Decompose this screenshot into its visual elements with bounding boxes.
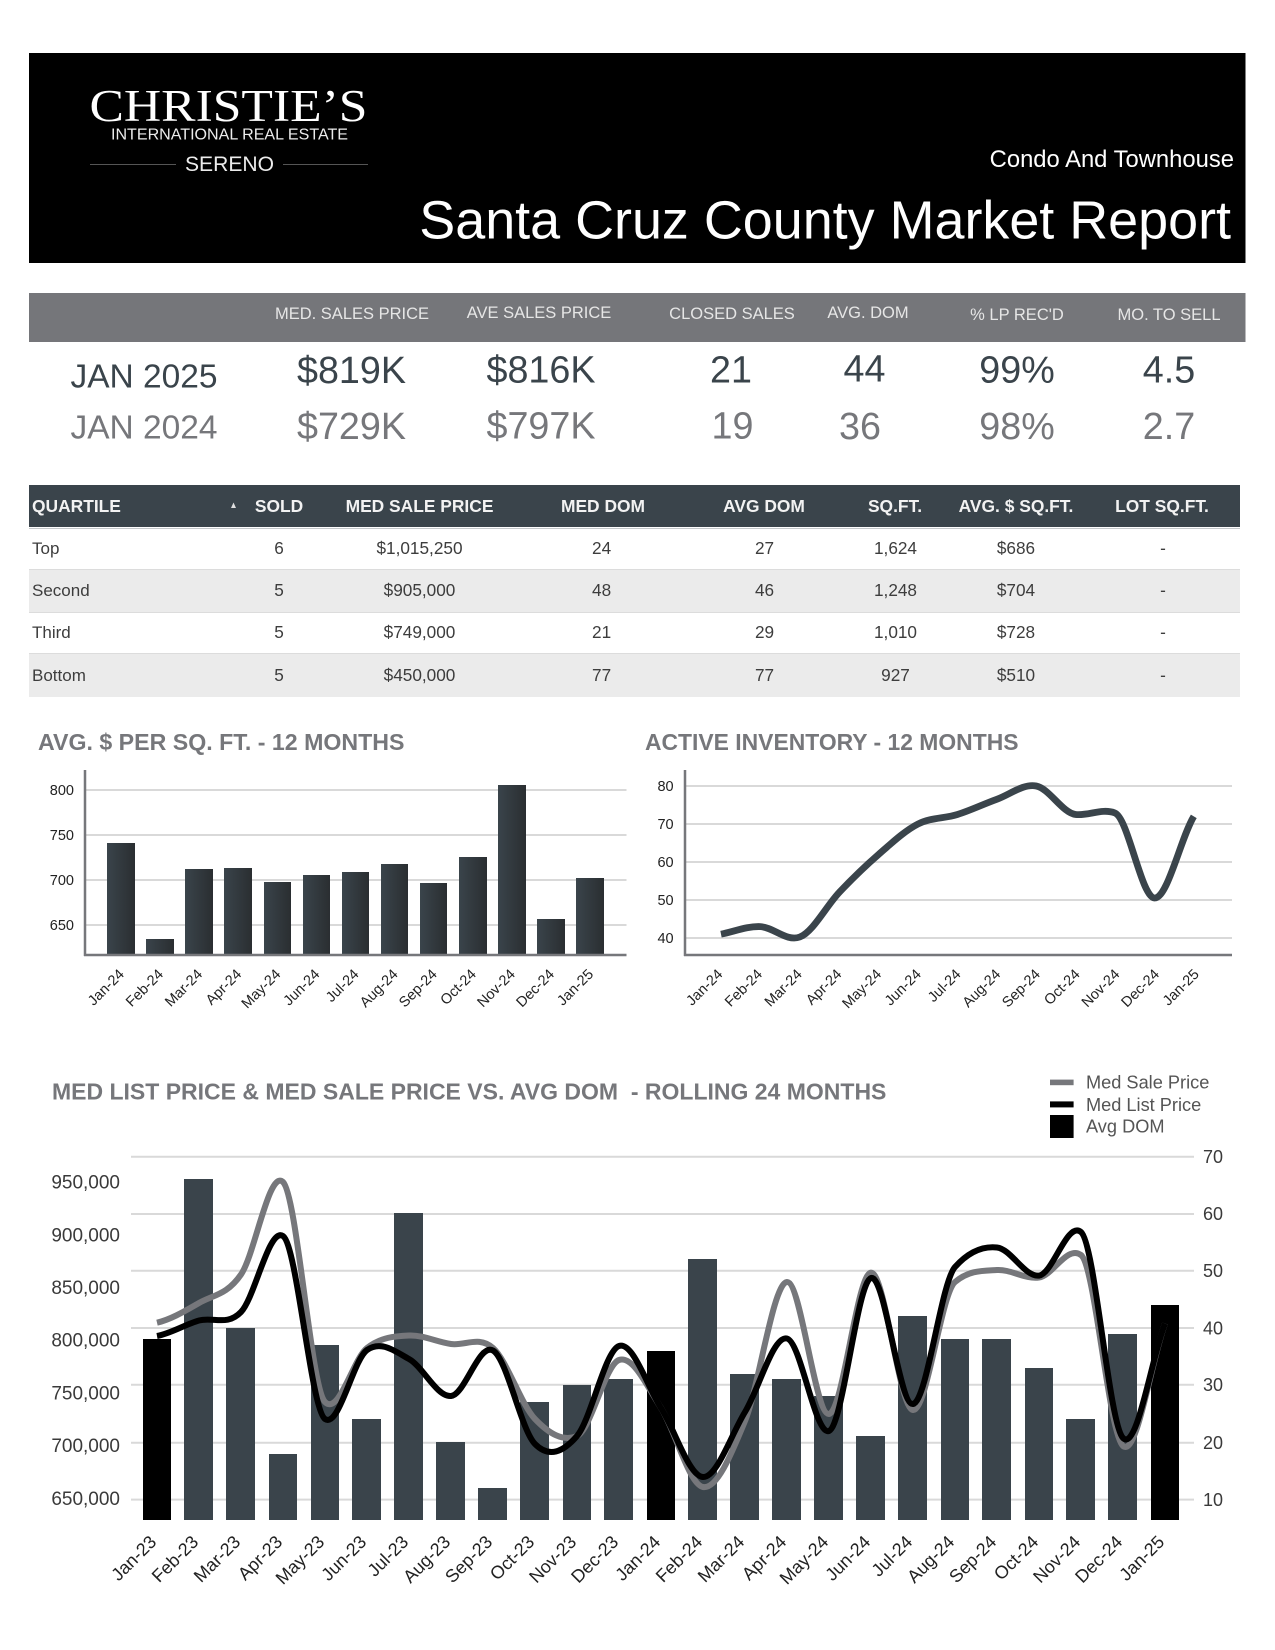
month labels: Sep-24 [945, 1532, 1000, 1587]
right axis: DOM: 50 [1203, 1261, 1223, 1281]
table row: Second: 5 [274, 580, 284, 600]
table row: Second [29, 569, 1240, 612]
table row: Third: $749,000 [384, 622, 455, 642]
line chart: active inventory, 12 months: Nov-24 [1079, 967, 1123, 1011]
key metrics: Jan 2025 row: 99% [979, 349, 1055, 391]
table row: Third: 1,010 [874, 622, 917, 642]
table header row: MED DOM [561, 496, 645, 516]
quartile table [29, 485, 1240, 697]
table row: Third: Third [32, 623, 71, 642]
bar chart: avg $ per sq ft, 12 months [50, 770, 626, 1012]
right axis: DOM [1203, 1147, 1223, 1510]
table row: Second: - [1160, 580, 1166, 600]
legend: Med Sale Price [1086, 1073, 1209, 1093]
month labels: Oct-23 [486, 1532, 538, 1584]
left axis: price: 700,000 [51, 1436, 120, 1457]
month labels: Jul-24 [868, 1532, 916, 1580]
month labels: Feb-23 [148, 1532, 202, 1586]
right axis: DOM: 60 [1203, 1204, 1223, 1224]
table row: Bottom: 927 [881, 665, 910, 685]
month labels: Feb-24 [652, 1532, 706, 1586]
left axis: price: 800,000 [51, 1330, 120, 1352]
left axis: price [51, 1172, 120, 1510]
key metrics: Jan 2024 row: 2.7 [1143, 405, 1195, 447]
month labels: Sep-23 [441, 1532, 496, 1587]
key metrics column header band: MO. TO SELL [1117, 306, 1221, 324]
bar chart: avg $ per sq ft, 12 months: 800 [50, 783, 74, 799]
right axis: DOM: 20 [1203, 1433, 1223, 1453]
right axis: DOM: 30 [1203, 1375, 1223, 1395]
table header row [29, 485, 1240, 528]
line chart: active inventory, 12 months: Apr-24 [803, 967, 845, 1009]
month labels: May-23 [272, 1532, 328, 1588]
table row: Top: 27 [755, 538, 774, 558]
legend [1050, 1073, 1209, 1138]
med list price line [157, 1230, 1165, 1477]
table row: Third: 21 [592, 622, 611, 642]
table row: Bottom: Bottom [32, 666, 86, 685]
key metrics: Jan 2025 row: 21 [710, 349, 752, 391]
avg DOM bars [143, 1179, 1179, 1520]
left axis: price: 850,000 [51, 1278, 120, 1299]
table row: Third: 29 [755, 622, 774, 642]
line chart: active inventory, 12 months [657, 770, 1232, 1012]
line chart: active inventory, 12 months: 60 [657, 855, 674, 871]
table row: Top: - [1160, 538, 1166, 558]
line chart: active inventory, 12 months: Jan-25 [1160, 967, 1203, 1009]
month labels: Jul-23 [364, 1532, 412, 1580]
key metrics: Jan 2024 row: $729K [297, 405, 406, 447]
table row: Third [29, 612, 1240, 642]
line chart: active inventory, 12 months: May-24 [840, 967, 885, 1012]
month labels: Mar-24 [694, 1532, 748, 1586]
month labels: Aug-24 [903, 1532, 958, 1587]
key metrics: Jan 2024 row [70, 405, 1195, 447]
month labels: Jan-25 [1115, 1532, 1168, 1585]
bar chart: avg $ per sq ft, 12 months: Jul-24 [323, 967, 362, 1006]
bar chart: avg $ per sq ft, 12 months: Sep-24 [396, 967, 441, 1011]
month labels: Oct-24 [990, 1532, 1042, 1584]
table row: Bottom: 77 [592, 665, 611, 685]
key metrics: Jan 2025 row: 44 [844, 348, 885, 390]
table row: Bottom: 77 [755, 665, 774, 685]
bar chart: avg $ per sq ft, 12 months: Dec-24 [514, 967, 558, 1011]
med sale price line [157, 1181, 1165, 1487]
heading: rolling 24 months: MED LIST PRICE & MED SALE PRICE VS. AVG DOM - ROLLING 24 MONTHS [52, 1078, 886, 1104]
table row: Bottom: $450,000 [384, 665, 455, 685]
table row: Bottom: - [1160, 665, 1166, 685]
table header row: MED SALE PRICE [346, 496, 493, 516]
logo: Christie's International Real Estate Sereno: INTERNATIONAL REAL ESTATE [111, 126, 348, 144]
right axis: DOM: 70 [1203, 1147, 1223, 1167]
key metrics: Jan 2025 row: JAN 2025 [70, 358, 218, 396]
month labels: Nov-24 [1029, 1532, 1084, 1587]
heading: avg $ per sq ft: AVG. $ PER SQ. FT. - 12 MONTHS [38, 729, 404, 755]
month labels [107, 1532, 1168, 1588]
right axis: DOM: 40 [1203, 1318, 1223, 1338]
table header row: SQ.FT. [868, 496, 922, 516]
line chart: active inventory, 12 months: 70 [657, 817, 674, 833]
key metrics: Jan 2024 row: $797K [487, 405, 595, 447]
bar chart: avg $ per sq ft, 12 months: 650 [50, 918, 74, 934]
left axis: price: 950,000 [51, 1172, 120, 1194]
bar chart: avg $ per sq ft, 12 months: Jan-25 [554, 967, 597, 1009]
key metrics column header band: % LP REC'D [970, 306, 1064, 324]
bar chart: avg $ per sq ft, 12 months: Mar-24 [162, 967, 206, 1010]
month labels: Aug-23 [399, 1532, 454, 1587]
line chart: active inventory, 12 months: 40 [657, 931, 674, 947]
key metrics column header band: MED. SALES PRICE [275, 305, 429, 323]
key metrics: Jan 2024 row: 19 [712, 405, 753, 447]
table header row: SOLD [255, 496, 303, 516]
table row: Third: $728 [997, 622, 1035, 642]
key metrics: Jan 2025 row: $816K [487, 349, 595, 391]
table row: Second: 46 [755, 580, 774, 600]
table row: Third: - [1160, 622, 1166, 642]
table row: Third: 5 [274, 622, 284, 642]
right axis: DOM: 10 [1203, 1490, 1223, 1510]
table row: Top: 1,624 [874, 538, 917, 558]
bar chart: avg $ per sq ft, 12 months: Jun-24 [281, 967, 323, 1009]
table row: Bottom: $510 [997, 665, 1035, 685]
key metrics column header band: AVE SALES PRICE [467, 304, 611, 322]
line chart: active inventory, 12 months: Oct-24 [1041, 967, 1084, 1009]
table row: Bottom [29, 653, 1240, 697]
line chart: active inventory, 12 months: 80 [657, 779, 674, 795]
bar chart: avg $ per sq ft, 12 months: 700 [50, 873, 74, 889]
key metrics: Jan 2024 row: 36 [839, 405, 881, 447]
bar chart: avg $ per sq ft, 12 months: May-24 [239, 967, 284, 1012]
table header row: AVG. $ SQ.FT. [959, 496, 1073, 516]
left axis: price: 750,000 [51, 1384, 120, 1404]
line chart: active inventory, 12 months: Feb-24 [722, 967, 766, 1010]
key metrics: Jan 2025 row: 4.5 [1143, 349, 1195, 391]
key metrics: Jan 2024 row: JAN 2024 [70, 410, 218, 446]
combo chart: med list and sale price vs avg DOM [51, 1147, 1223, 1588]
key metrics column header band: CLOSED SALES [669, 305, 795, 323]
left axis: price: 650,000 [51, 1489, 120, 1510]
logo: Christie's International Real Estate Sereno: CHRISTIE’S [90, 81, 368, 131]
line chart: active inventory, 12 months: Mar-24 [762, 967, 806, 1010]
legend: Med List Price [1086, 1095, 1201, 1115]
logo: Christie's International Real Estate Sereno [90, 81, 368, 176]
key metrics column header band [29, 293, 1246, 342]
key metrics: Jan 2025 row: $819K [297, 349, 406, 391]
header banner [29, 53, 1246, 263]
bar chart: avg $ per sq ft, 12 months: Feb-24 [123, 967, 167, 1010]
legend: Avg DOM [1086, 1117, 1164, 1137]
month labels: May-24 [776, 1532, 832, 1588]
bar chart: avg $ per sq ft, 12 months: Nov-24 [474, 967, 519, 1011]
month labels: Apr-24 [738, 1532, 790, 1584]
table row: Second: Second [32, 581, 90, 600]
line chart: active inventory, 12 months: Aug-24 [960, 967, 1004, 1011]
line chart: active inventory, 12 months: Jan-24 [684, 967, 726, 1009]
line chart: active inventory, 12 months: Sep-24 [999, 967, 1044, 1011]
month labels: Jun-24 [821, 1532, 874, 1585]
left axis: price: 900,000 [51, 1226, 120, 1246]
heading: active inventory: ACTIVE INVENTORY - 12 MONTHS [645, 729, 1018, 755]
table row: Second: 1,248 [874, 580, 917, 600]
month labels: Mar-23 [190, 1532, 244, 1586]
table row: Top: $1,015,250 [376, 538, 463, 558]
table row: Top: Top [32, 539, 59, 558]
table header row: QUARTILE [32, 496, 121, 516]
month labels: Jun-23 [317, 1532, 370, 1585]
table row: Top [32, 538, 1166, 558]
table header row: LOT SQ.FT. [1115, 496, 1209, 516]
key metrics: Jan 2025 row [70, 348, 1195, 396]
bar chart: avg $ per sq ft, 12 months: Apr-24 [203, 967, 245, 1009]
line chart: active inventory, 12 months: Dec-24 [1119, 967, 1163, 1011]
month labels: Jan-24 [611, 1532, 664, 1585]
bar chart: avg $ per sq ft, 12 months: 750 [50, 828, 74, 844]
line chart: active inventory, 12 months: Jul-24 [925, 967, 964, 1006]
month labels: Apr-23 [234, 1532, 286, 1584]
table header row: AVG DOM [723, 496, 805, 516]
table row: Second: $704 [997, 580, 1036, 600]
table row: Top: 6 [274, 538, 284, 558]
table row: Bottom: 5 [274, 665, 284, 685]
table row: Second: 48 [592, 580, 611, 600]
bar chart: avg $ per sq ft, 12 months: Jan-24 [85, 967, 128, 1009]
inventory trend line [721, 786, 1194, 938]
month labels: Nov-23 [525, 1532, 580, 1587]
key metrics: Jan 2024 row: 98% [979, 405, 1055, 447]
line chart: active inventory, 12 months: Jun-24 [882, 967, 925, 1009]
line chart: active inventory, 12 months: 50 [657, 893, 674, 909]
bar chart: avg $ per sq ft, 12 months: Oct-24 [438, 967, 480, 1009]
month labels: Dec-24 [1071, 1532, 1126, 1587]
bar chart: avg $ per sq ft, 12 months: Aug-24 [357, 967, 402, 1011]
table row: Top: 24 [592, 538, 612, 558]
table row: Top: $686 [997, 538, 1035, 558]
month labels: Jan-23 [107, 1532, 160, 1585]
month labels: Dec-23 [567, 1532, 622, 1587]
report title: Santa Cruz County Market Report [419, 190, 1231, 250]
logo: Christie's International Real Estate Sereno: SERENO [185, 152, 274, 176]
subtitle: Condo And Townhouse [990, 146, 1234, 173]
key metrics column header band: AVG. DOM [827, 304, 909, 322]
table row: Second: $905,000 [384, 580, 455, 600]
